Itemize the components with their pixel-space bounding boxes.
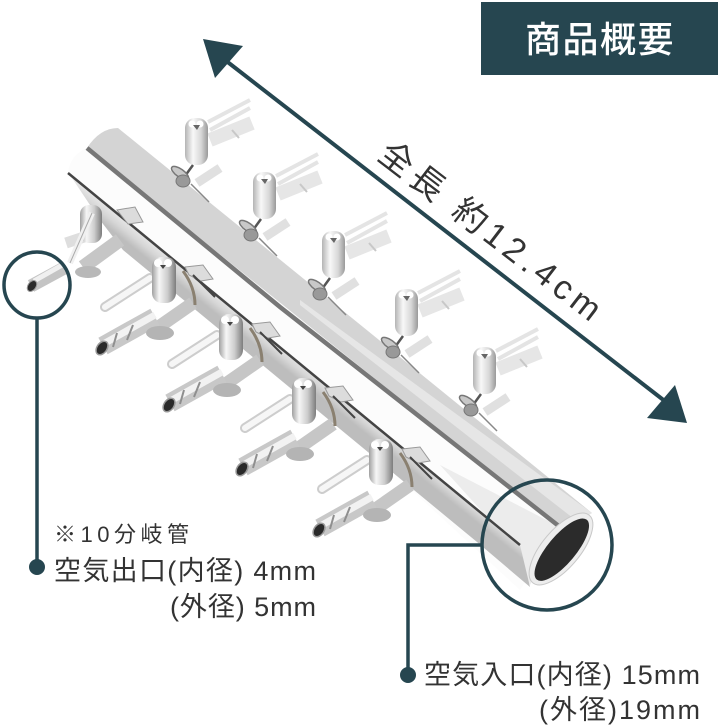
manifold tube — [68, 128, 604, 595]
dark stripe — [87, 148, 560, 527]
dimension arrow: total length — [203, 39, 687, 423]
lower row valves — [94, 257, 432, 539]
tube end opening — [518, 503, 604, 595]
header: 商品概要: 商品概要 — [525, 19, 675, 60]
callout: air inlet circle and leader — [401, 480, 612, 682]
white reflective band — [68, 148, 560, 590]
upper grey band — [87, 128, 592, 527]
callout: air outlet circle and leader — [4, 252, 70, 574]
inlet size text: 空気入口(内径) 15mm — [424, 660, 700, 690]
first outlet valve with barb — [25, 205, 143, 293]
inlet size text: (外径)19mm — [539, 695, 700, 725]
lower band — [72, 178, 530, 587]
inlet size text — [424, 660, 700, 725]
outlet size text — [54, 556, 316, 622]
header: 商品概要 — [481, 2, 718, 75]
outlet size text: (外径) 5mm — [170, 592, 316, 622]
outlet size text: 空気出口(内径) 4mm — [54, 556, 316, 586]
upper row valves — [170, 100, 540, 431]
outlet note: ※10分岐管 — [54, 522, 189, 547]
length label: 全長 約12.4cm — [371, 134, 608, 329]
